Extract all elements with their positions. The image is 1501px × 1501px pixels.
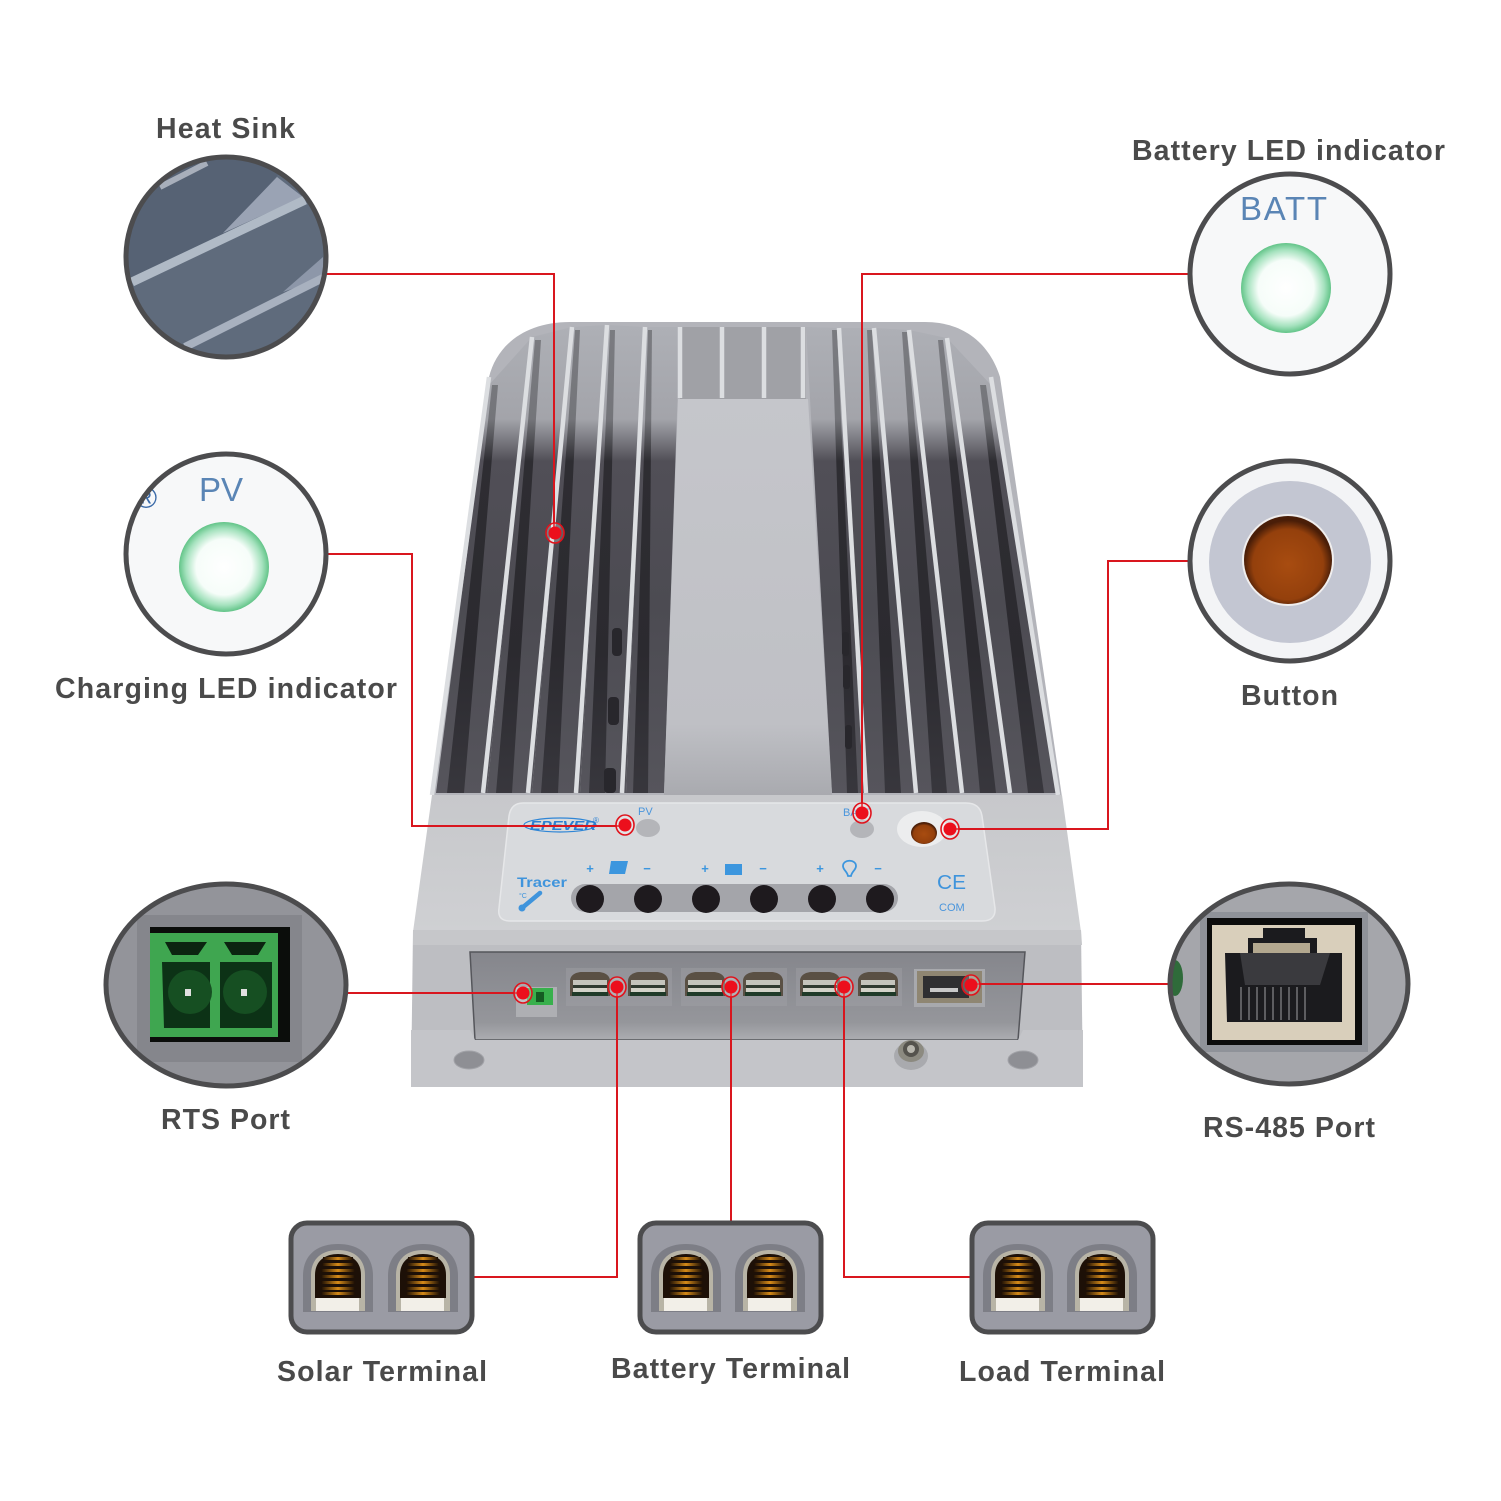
callout: charging LED: [55, 448, 397, 705]
terminal photo: [640, 1223, 821, 1332]
heading: Heat Sink: [156, 113, 295, 145]
thermometer icon: [518, 892, 540, 912]
mounting hole right: [1008, 1051, 1038, 1069]
BATT label: BATT: [843, 807, 871, 819]
marker: battery terminal: [722, 977, 740, 997]
RTS port on device: [516, 987, 557, 1017]
lower shell: [411, 795, 1083, 1087]
recess panel: [470, 952, 1025, 1040]
EPEVER logo: [524, 816, 599, 833]
marker: RS-485 port: [962, 975, 980, 995]
marker: PV LED: [616, 815, 634, 835]
detail circle: PV: [199, 471, 243, 508]
leader lines: [326, 274, 1190, 1277]
heading: RTS Port: [161, 1104, 290, 1136]
heat sink body: [432, 322, 1062, 797]
load terminal sockets: [796, 968, 902, 1006]
heading: Battery Terminal: [611, 1353, 850, 1385]
callout: solar terminal: [277, 1223, 487, 1388]
centre panel: [664, 399, 832, 795]
top slots above center panel: [680, 327, 806, 400]
button on panel: [897, 811, 947, 847]
thermometer icon: °C: [519, 892, 527, 900]
heading: Solar Terminal: [277, 1356, 487, 1388]
PV label: PV: [638, 806, 653, 818]
plus minus marks: +: [586, 861, 594, 876]
marker: load terminal: [835, 977, 853, 997]
terminal symbols: [586, 861, 882, 876]
marker: solar terminal: [608, 977, 626, 997]
marker: heat sink: [546, 523, 564, 543]
BATT LED: [850, 820, 874, 838]
detail circle: [120, 448, 332, 660]
detail circle: BATT: [1240, 190, 1327, 227]
marker: BATT LED: [853, 803, 871, 823]
detail circle: [1185, 170, 1397, 382]
heading: Button: [1241, 680, 1338, 712]
heading: Battery LED indicator: [1132, 135, 1445, 167]
marker: RTS port: [514, 983, 532, 1003]
heading: RS-485 Port: [1203, 1112, 1376, 1144]
screw holes: [576, 885, 894, 913]
heading: Charging LED indicator: [55, 673, 397, 705]
COM label: COM: [939, 902, 965, 914]
terminal symbols: −: [643, 861, 651, 876]
callout: button: [1185, 456, 1397, 712]
callout: battery terminal: [611, 1223, 850, 1385]
mounting hole left: [454, 1051, 484, 1069]
fin shadow strips: [447, 330, 1044, 793]
heading: Load Terminal: [959, 1356, 1165, 1388]
callout: heat sink: [120, 113, 335, 365]
terminal symbols: −: [759, 861, 767, 876]
terminal symbols: −: [874, 861, 882, 876]
terminal photo: [291, 1223, 472, 1332]
detail ellipse: [100, 880, 355, 1092]
EPEVER logo: ®: [593, 816, 599, 825]
callout: RS-485 port: [1165, 880, 1415, 1144]
heat sink fin channels: [436, 325, 1057, 793]
callout: battery LED: [1132, 135, 1445, 382]
device: solar charge controller: [411, 322, 1083, 1087]
RS-485 port on device: [914, 969, 985, 1007]
marker: button: [941, 819, 959, 839]
detail circle: [1185, 456, 1397, 668]
ground screw: [894, 1040, 928, 1070]
PV LED: [636, 819, 660, 837]
terminal symbols: +: [816, 861, 824, 876]
fin highlights: [432, 325, 1058, 795]
callout: RTS port: [100, 880, 355, 1136]
connector access strip: [571, 884, 898, 912]
detail circle: ®: [135, 482, 157, 515]
Tracer label: Tracer: [517, 874, 568, 890]
terminal symbols: +: [701, 861, 709, 876]
CE mark: CE: [937, 872, 966, 894]
battery terminal sockets: [681, 968, 787, 1006]
callout: load terminal: [959, 1223, 1165, 1388]
detail circle: [120, 150, 335, 365]
internal pegs: [604, 628, 852, 793]
terminal photo: [972, 1223, 1153, 1332]
solar terminal sockets: [566, 968, 672, 1006]
detail ellipse: [1165, 880, 1415, 1090]
control sticker: [499, 803, 995, 921]
EPEVER logo: EPEVER: [530, 818, 597, 833]
